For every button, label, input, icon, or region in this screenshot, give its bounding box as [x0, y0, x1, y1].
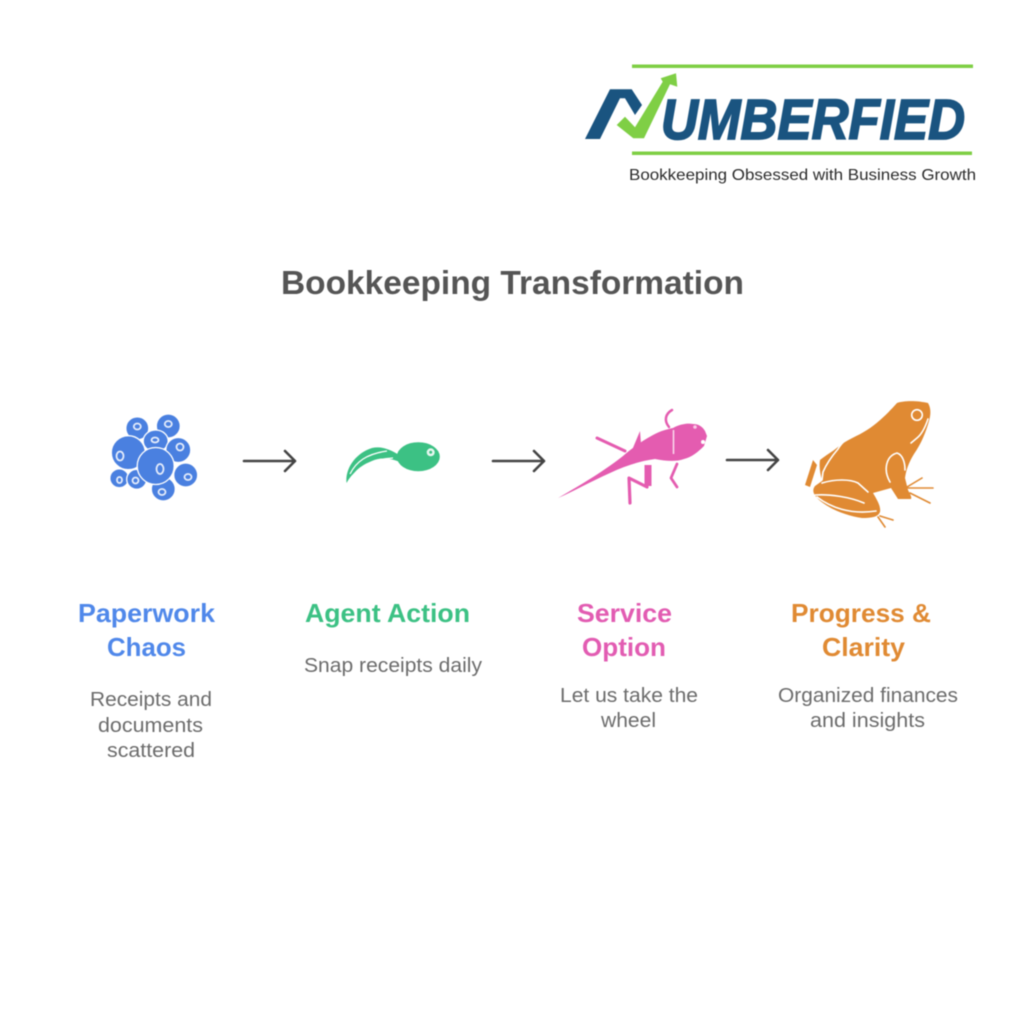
step 4: Progress & Clarity [778, 598, 958, 732]
logo mark: green check arrow [617, 73, 677, 138]
text: Receipts and documents scattered: documents [98, 715, 203, 737]
text: Let us take the wheel: wheel [600, 710, 656, 732]
text: Snap receipts daily: Snap receipts daily [304, 655, 482, 677]
icon: orange frog [805, 401, 933, 527]
text: Receipts and documents scattered: scattered [107, 740, 195, 762]
text: Let us take the wheel [560, 685, 698, 732]
logo mark: blue N [585, 89, 642, 139]
text: Organized finances and insights: and insights [810, 710, 925, 732]
step 1: Paperwork Chaos [78, 598, 216, 762]
step 2: Agent Action [304, 598, 482, 677]
text: Receipts and documents scattered: Receipts and [90, 689, 212, 711]
logo: Numberfied [585, 64, 976, 184]
icon: pink tadpole with legs [558, 410, 707, 503]
heading: Service Option [577, 598, 672, 662]
arrow 2 [493, 451, 544, 471]
text: Organized finances and insights [778, 685, 958, 732]
heading: Progress & Clarity [791, 598, 931, 662]
heading: Paperwork Chaos [78, 598, 216, 662]
heading: Service Option: Service [577, 598, 672, 628]
title: Bookkeeping Transformation [281, 264, 744, 301]
heading: Progress & Clarity: Clarity [822, 632, 906, 662]
heading: Paperwork Chaos: Chaos [107, 632, 186, 662]
logo tagline: Bookkeeping Obsessed with Business Growth [629, 167, 976, 184]
heading: Paperwork Chaos: Paperwork [78, 598, 216, 628]
icon: blue cell cluster [110, 414, 198, 501]
text: Receipts and documents scattered [90, 689, 212, 762]
step 3: Service Option [560, 598, 698, 732]
text: Organized finances and insights: Organized finances [778, 685, 958, 707]
heading: Agent Action: Agent Action [305, 598, 470, 628]
arrow 1 [244, 451, 295, 471]
text: Let us take the wheel: Let us take the [560, 685, 698, 707]
heading: Service Option: Option [582, 632, 666, 662]
logo wordmark: UMBERFIED [661, 88, 965, 152]
heading: Progress & Clarity: Progress & [791, 598, 931, 628]
arrow 3 [727, 450, 778, 470]
icon: green tadpole [346, 442, 440, 483]
